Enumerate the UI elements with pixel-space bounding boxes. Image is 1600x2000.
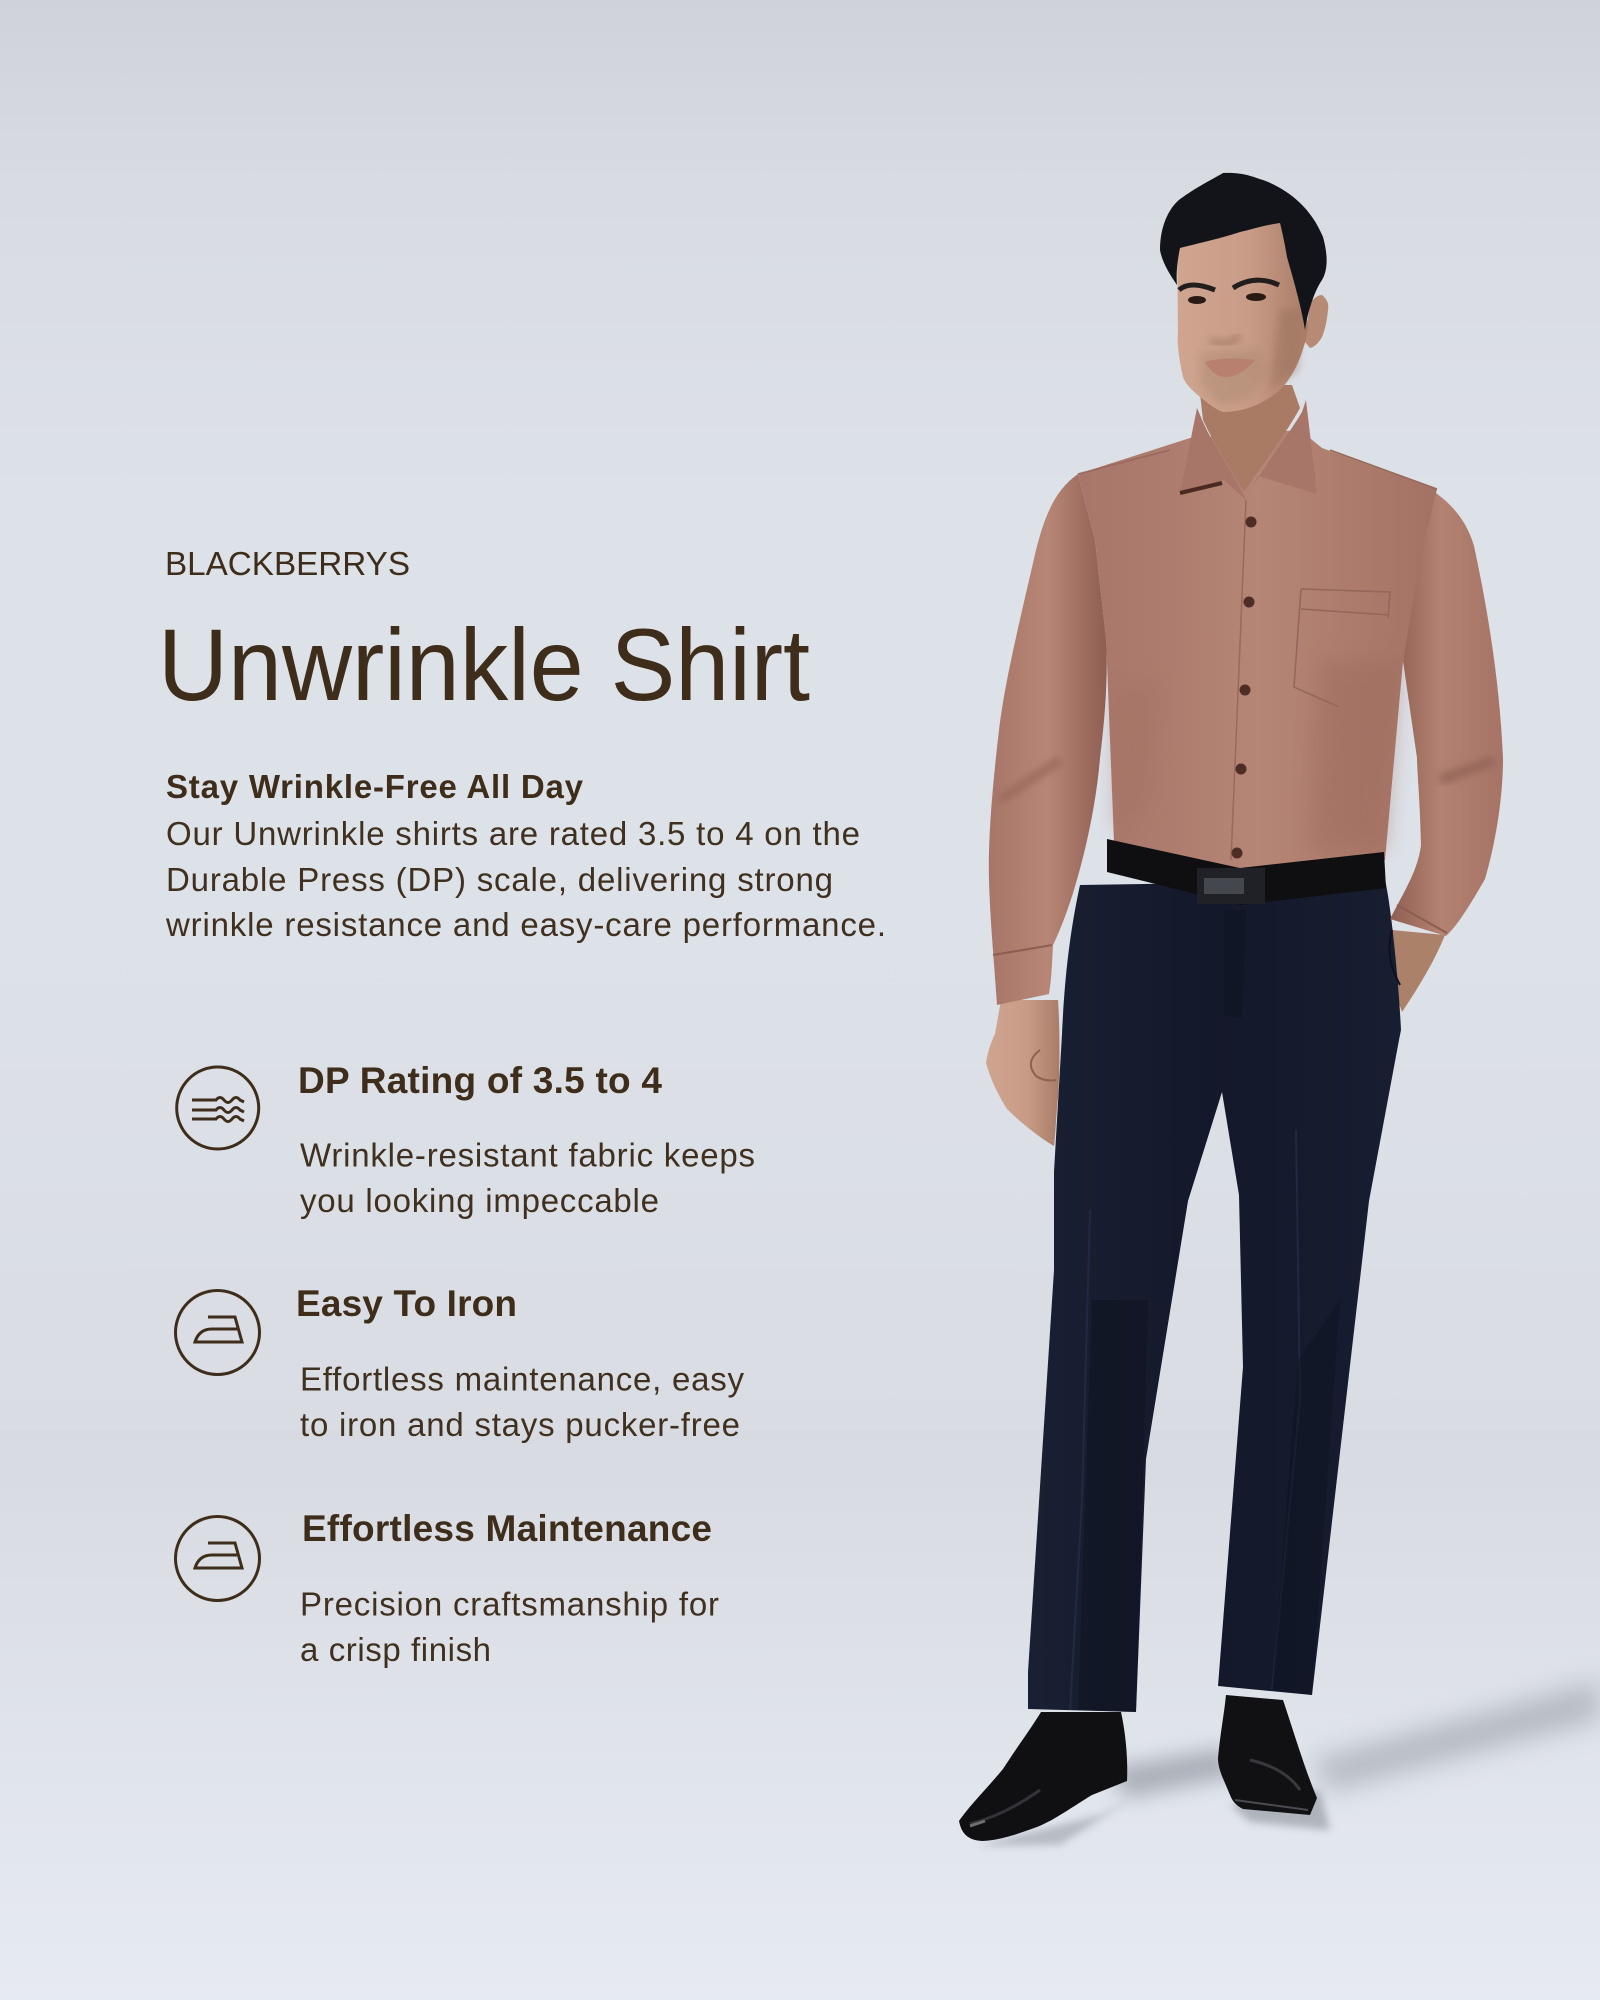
heading: Effortless Maintenance <box>302 1508 712 1549</box>
eyebrows <box>1179 280 1279 290</box>
hair <box>1160 173 1327 330</box>
background floor <box>0 1430 1600 2000</box>
intro text block <box>165 768 886 943</box>
left sleeve <box>989 474 1107 1005</box>
face <box>1177 215 1308 412</box>
trousers <box>1028 880 1401 1712</box>
right sleeve <box>1390 489 1503 936</box>
description: Effortless maintenance, easy <box>300 1360 744 1398</box>
placket <box>1231 500 1246 860</box>
head <box>1160 173 1328 412</box>
mouth <box>1205 358 1255 377</box>
title: Unwrinkle Shirt <box>158 608 810 722</box>
intro text block: Stay Wrinkle-Free All Day <box>166 768 584 805</box>
shirt body <box>1078 430 1437 868</box>
left shoe <box>959 1712 1127 1841</box>
description <box>300 1586 719 1668</box>
illustration: standing man <box>959 173 1503 1841</box>
feature: easy to iron <box>176 1283 744 1443</box>
feature: DP rating <box>177 1060 755 1219</box>
heading: Easy To Iron <box>296 1283 517 1324</box>
floor shadow <box>975 1682 1600 1846</box>
right shoe <box>1218 1695 1317 1815</box>
intro text block: wrinkle resistance and easy-care performance. <box>165 906 886 943</box>
description <box>300 1136 755 1219</box>
belt <box>1107 839 1386 905</box>
description: Wrinkle-resistant fabric keeps <box>300 1136 755 1174</box>
buttons <box>1232 516 1256 858</box>
eyes <box>1188 293 1266 304</box>
description: Precision craftsmanship for <box>300 1586 719 1622</box>
icon: fabric waves <box>177 1067 259 1149</box>
background wall <box>0 0 1600 1430</box>
heading: DP Rating of 3.5 to 4 <box>298 1060 662 1101</box>
feature: effortless maintenance <box>176 1508 719 1668</box>
ear <box>1305 295 1328 348</box>
description: you looking impeccable <box>300 1182 659 1219</box>
neck <box>1199 385 1300 492</box>
left hand <box>986 1000 1060 1146</box>
intro text block: Our Unwrinkle shirts are rated 3.5 to 4 on the <box>166 815 860 852</box>
yoke seam <box>1078 450 1437 489</box>
icon: iron <box>176 1290 260 1374</box>
description <box>300 1360 744 1443</box>
description: to iron and stays pucker-free <box>300 1406 740 1443</box>
pocket <box>1294 589 1390 707</box>
stubble and nose shadow <box>1200 348 1265 405</box>
icon: iron <box>176 1516 260 1600</box>
description: a crisp finish <box>300 1631 491 1668</box>
intro text block: Durable Press (DP) scale, delivering strong <box>166 861 833 898</box>
collar <box>1180 400 1317 500</box>
right hand in pocket <box>1388 930 1445 1012</box>
brand name: BLACKBERRYS <box>165 545 410 582</box>
